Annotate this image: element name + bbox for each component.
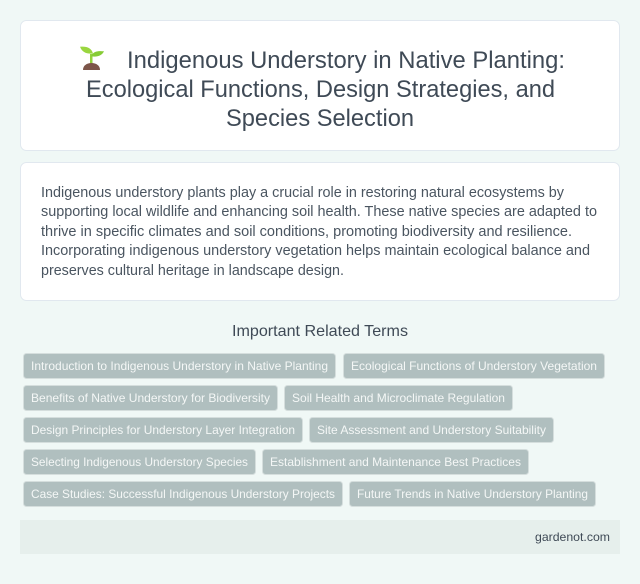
- tag: [350, 482, 596, 506]
- tag: Soil Health and Microclimate Regulation: [292, 391, 505, 405]
- tag: Introduction to Indigenous Understory in Native Planting: [31, 359, 328, 373]
- tag: Site Assessment and Understory Suitability: [317, 423, 546, 437]
- text block: description: supporting local wildlife and enhancing soil health. These native species are adapted to: [41, 204, 597, 220]
- tag list: [24, 354, 604, 506]
- tag: Case Studies: Successful Indigenous Understory Projects: [31, 487, 335, 501]
- panel: description card: [20, 162, 620, 300]
- title: [86, 47, 565, 132]
- heading: important related terms: Important Related Terms: [232, 323, 408, 340]
- tag: [24, 354, 336, 378]
- tag: [344, 354, 604, 378]
- text block: description: thrive in specific climates and soil conditions, promoting biodiversity and resilience.: [41, 224, 572, 240]
- tag: Ecological Functions of Understory Vegetation: [351, 359, 597, 373]
- tag: [310, 418, 554, 442]
- tag: [24, 418, 302, 442]
- tag: [24, 482, 342, 506]
- footer: gardenot.com: [535, 530, 610, 544]
- text block: description: preserves cultural heritage in landscape design.: [41, 263, 344, 279]
- title: Indigenous Understory in Native Planting:: [127, 47, 565, 74]
- text block: description: [41, 185, 597, 279]
- title: Ecological Functions, Design Strategies, and: [86, 76, 555, 103]
- text block: description: Incorporating indigenous understory vegetation helps maintain ecological balance and: [41, 243, 590, 259]
- tag: Establishment and Maintenance Best Practices: [270, 455, 521, 469]
- icon: seedling: [80, 47, 104, 70]
- tag: Design Principles for Understory Layer Integration: [31, 423, 295, 437]
- tag: [24, 450, 256, 474]
- title: Species Selection: [226, 105, 414, 132]
- tag: Selecting Indigenous Understory Species: [31, 455, 248, 469]
- footer: [20, 520, 620, 554]
- tag: [262, 450, 528, 474]
- tag: [284, 386, 512, 410]
- panel: title card: [20, 20, 620, 150]
- text block: description: Indigenous understory plants play a crucial role in restoring natural ecosystems by: [41, 185, 565, 201]
- tag: Future Trends in Native Understory Planting: [357, 487, 588, 501]
- tag: [24, 386, 278, 410]
- tag: Benefits of Native Understory for Biodiversity: [31, 391, 270, 405]
